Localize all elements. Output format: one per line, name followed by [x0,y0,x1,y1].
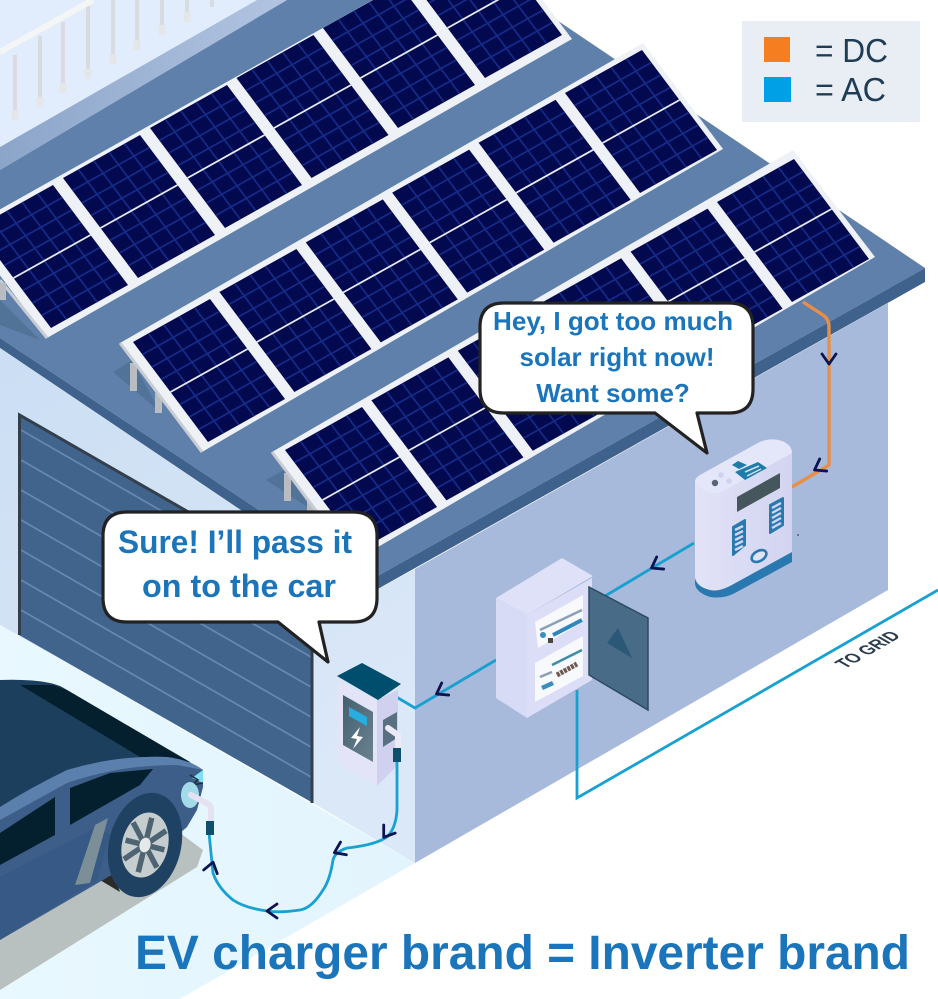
left wall [0,348,415,863]
speech bubble: inverter: Want some? [536,378,690,408]
AC wire to distribution board [393,543,694,708]
grid wire [577,590,938,798]
car plug [191,795,214,835]
legend: = DC [815,32,888,69]
right wall [415,303,888,863]
background terrace [0,0,287,170]
speech bubble: EV charger [103,512,377,662]
legend: = AC [815,71,886,108]
speech bubble: inverter: solar right now! [520,342,714,372]
speech bubble: inverter: Hey, I got too much [493,306,733,336]
inverter vents [733,498,783,555]
to grid label: TO GRID [831,629,906,671]
headlight [181,770,203,808]
title: EV charger brand = Inverter brand [135,927,910,980]
car [0,680,203,990]
board door [589,587,648,710]
row 1 solar panels [0,0,572,338]
speech bubble: EV charger: Sure! I’ll pass it [118,524,352,560]
DC wire orange [792,302,829,487]
speech bubble: EV charger: on to the car [142,568,336,604]
inverter [695,439,799,598]
row 3 solar panels [272,150,875,561]
flow arrows [204,354,836,918]
roof [0,0,925,595]
EV charger [337,663,401,786]
garage door [19,414,313,803]
terrace railing [0,0,212,120]
ground [0,625,415,999]
car wheel [97,785,193,905]
speech bubble: inverter [480,303,753,453]
charging cable [209,762,397,912]
row 2 solar panels [120,43,723,452]
legend [742,21,920,122]
panel support legs [0,283,314,514]
distribution board [496,558,648,718]
